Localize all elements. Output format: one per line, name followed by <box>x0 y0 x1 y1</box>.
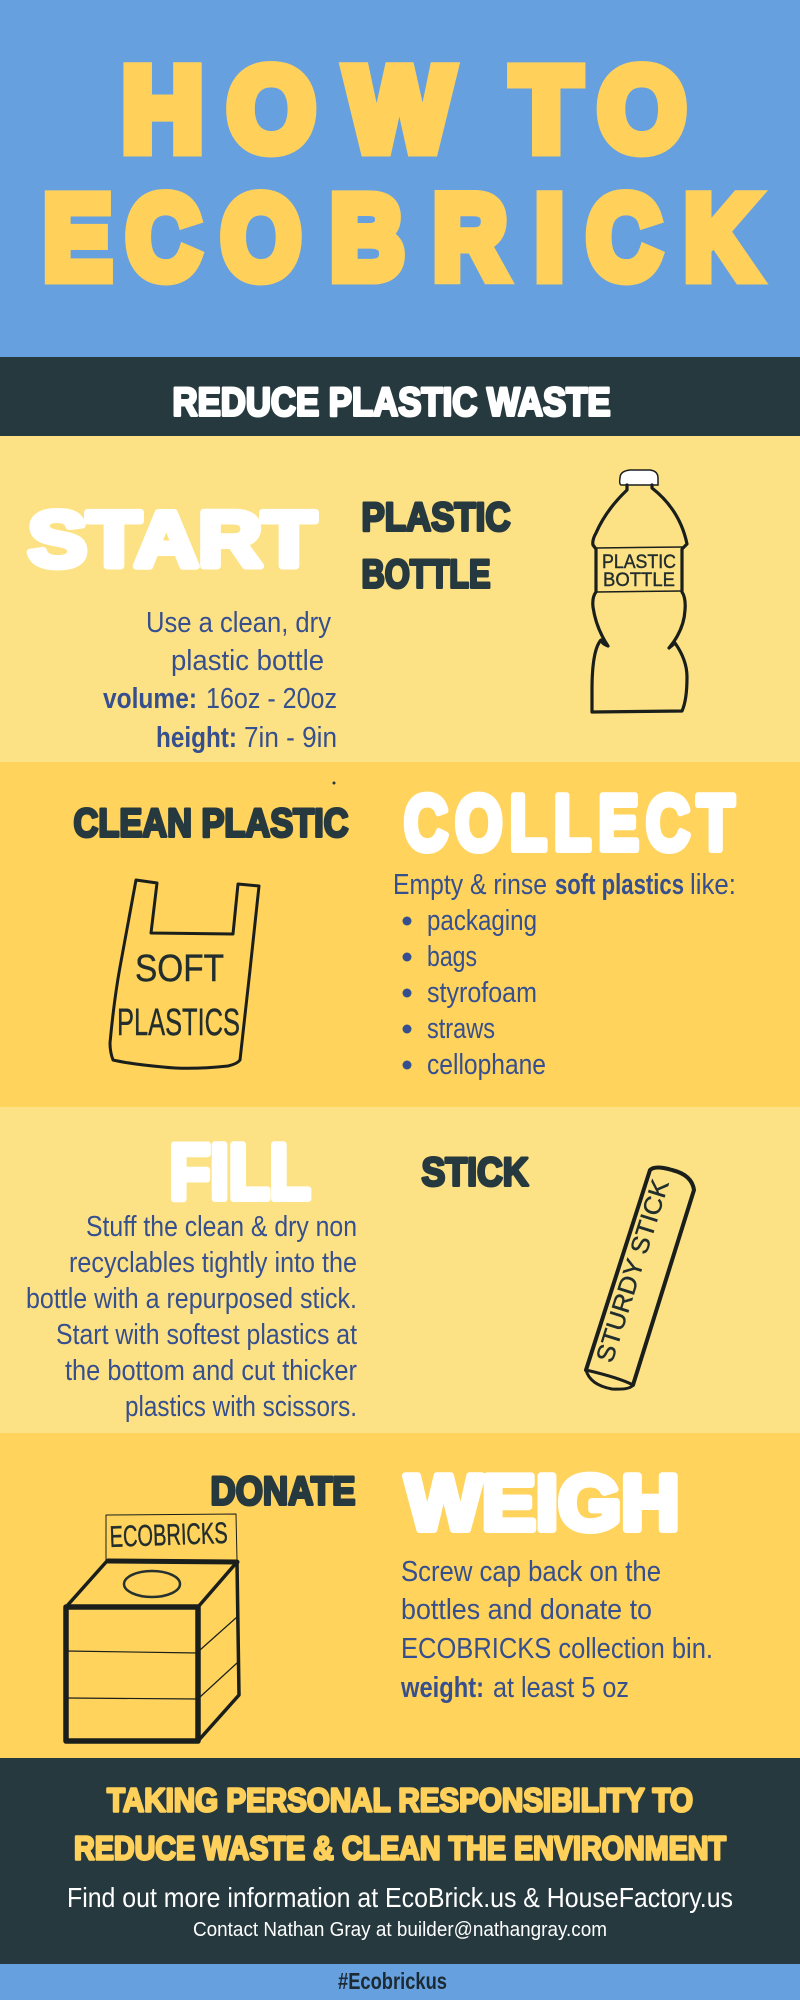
icon: plastic bottle <box>592 470 687 712</box>
text: collect intro: like: <box>690 869 736 901</box>
panel: subtitle band <box>0 357 800 436</box>
panel: start <box>0 436 800 762</box>
panel: title header <box>0 0 800 357</box>
text: start instructions: Use a clean, dry <box>146 607 331 639</box>
label: stick: STICK <box>422 1150 529 1194</box>
text: start instructions <box>103 607 337 754</box>
icon: soft plastics bag <box>110 880 259 1068</box>
label: donate: DONATE <box>210 1470 356 1514</box>
text: weigh instructions <box>400 1556 713 1704</box>
label: clean plastic: CLEAN PLASTIC <box>74 802 348 846</box>
icon: plastic bottle: PLASTIC <box>602 552 676 573</box>
list: soft plastics: styrofoam <box>427 977 537 1009</box>
list: soft plastics: cellophane <box>427 1049 546 1081</box>
text: weigh instructions: bottles and donate to <box>401 1594 652 1626</box>
text: weigh instructions: at least 5 oz <box>493 1672 629 1704</box>
label: plastic bottle: BOTTLE <box>362 552 490 596</box>
icon: soft plastics bag: PLASTICS <box>117 1002 240 1044</box>
text: fill instructions <box>26 1211 357 1423</box>
text: weigh instructions: Screw cap back on the <box>401 1556 661 1588</box>
label: plastic bottle <box>362 496 510 596</box>
callout: responsibility message <box>74 1782 726 1867</box>
icon: sturdy stick <box>586 1168 694 1389</box>
icon: ecobricks collection bin: ECOBRICKS <box>109 1517 228 1554</box>
panel: fill <box>0 1107 800 1433</box>
text: start instructions: plastic bottle <box>171 645 324 677</box>
text: more information: Find out more information at EcoBrick.us & HouseFactory.us <box>67 1882 733 1913</box>
text: fill instructions: recyclables tightly into the <box>69 1247 357 1279</box>
heading: weigh: WEIGH <box>406 1458 680 1546</box>
icon: plastic bottle: BOTTLE <box>603 570 675 591</box>
text: fill instructions: Stuff the clean & dry non <box>86 1211 357 1243</box>
subtitle: REDUCE PLASTIC WASTE <box>172 380 610 424</box>
heading: start: START <box>28 495 316 583</box>
list: soft plastics: straws <box>427 1013 495 1045</box>
panel: hashtag band <box>0 1964 800 2000</box>
text: collect intro <box>393 869 736 901</box>
text: weigh instructions: weight: <box>400 1672 484 1704</box>
callout: responsibility message: TAKING PERSONAL RESPONSIBILITY TO <box>107 1782 693 1819</box>
panel: footer <box>0 1758 800 1964</box>
text: contact: Contact Nathan Gray at builder@nathangray.com <box>193 1919 607 1941</box>
panel: collect <box>0 762 800 1107</box>
title: ecobrick: ECOBRICK <box>44 172 758 304</box>
text: hashtag: #Ecobrickus <box>338 1968 447 1994</box>
text: collect intro: Empty & rinse <box>393 869 547 901</box>
panel: weigh <box>0 1433 800 1758</box>
icon: sturdy stick: STURDY STICK <box>591 1176 675 1366</box>
text: fill instructions: Start with softest plastics at <box>56 1319 357 1351</box>
heading: collect: COLLECT <box>404 779 741 866</box>
text: start instructions: height: <box>156 722 237 754</box>
list: soft plastics: bags <box>427 941 477 973</box>
text: collect intro: soft plastics <box>555 869 684 901</box>
heading: fill: FILL <box>170 1128 310 1216</box>
text: fill instructions: plastics with scissors. <box>125 1391 357 1423</box>
title: how to: HOW TO <box>122 44 686 176</box>
icon: ecobricks collection bin <box>66 1514 239 1741</box>
text: start instructions: 7in - 9in <box>244 722 337 754</box>
label: plastic bottle: PLASTIC <box>362 496 510 540</box>
text: weigh instructions: ECOBRICKS collection bin. <box>401 1633 713 1665</box>
text: start instructions: volume: <box>103 683 197 715</box>
list: soft plastics <box>402 905 546 1081</box>
icon: soft plastics bag: SOFT <box>135 948 224 990</box>
text: start instructions: 16oz - 20oz <box>206 683 337 715</box>
text: fill instructions: bottle with a repurposed stick. <box>26 1283 357 1315</box>
list: soft plastics: packaging <box>427 905 537 937</box>
text: fill instructions: the bottom and cut thicker <box>65 1355 357 1387</box>
